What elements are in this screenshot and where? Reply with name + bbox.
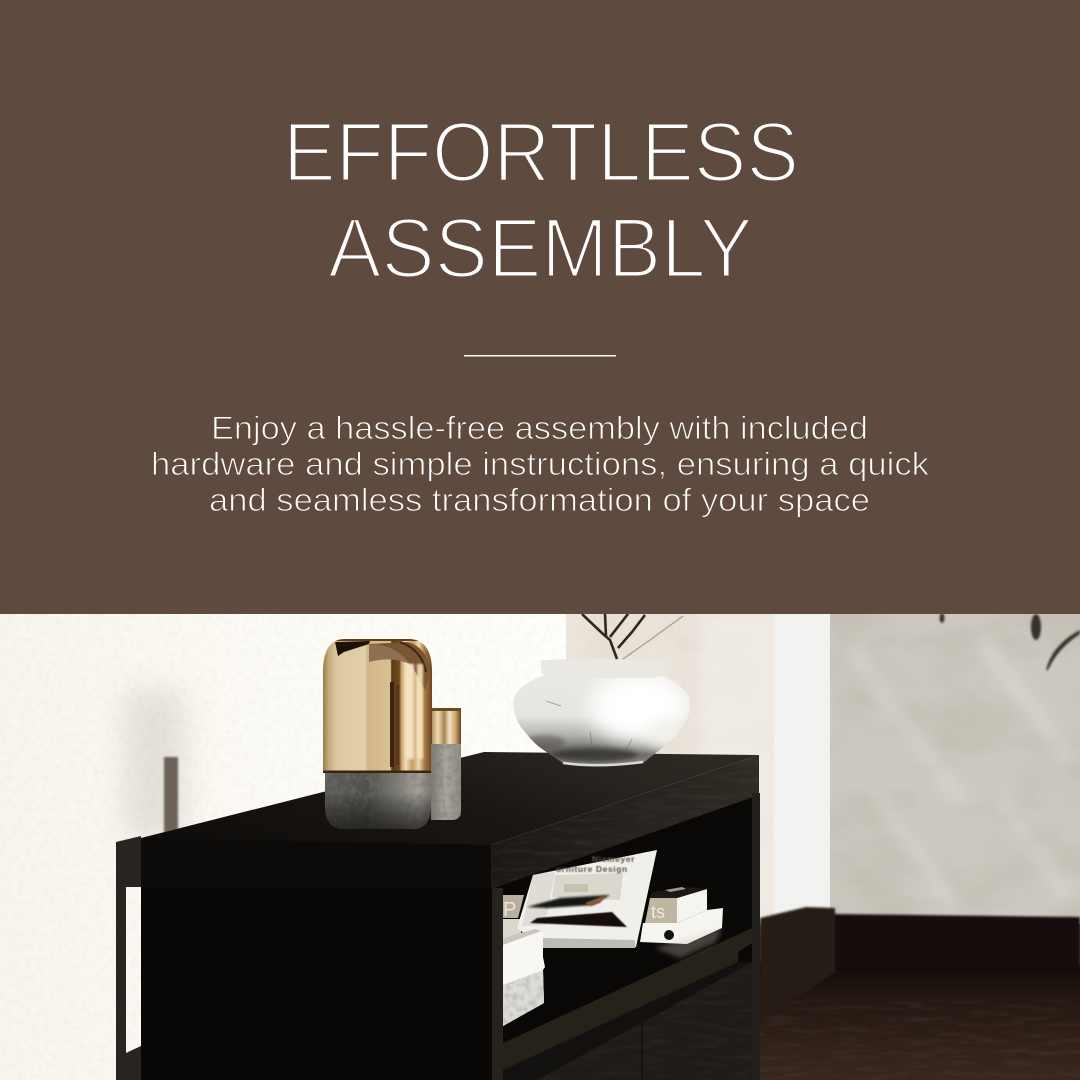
photo: styled cabinet scene: [0, 613, 1080, 1080]
drawer fronts: [537, 962, 752, 1080]
wall: right marble section: [830, 614, 1080, 924]
open compartment interior: [491, 790, 760, 1080]
cabinet top surface: [141, 752, 759, 845]
cabinet front: [141, 885, 492, 1080]
wall shadows: [116, 690, 185, 1080]
open design book: urniture Design: [556, 864, 628, 874]
stacked books on shelf: ts: [651, 902, 665, 922]
open design book: [517, 850, 657, 948]
stacked books on shelf: [640, 887, 723, 958]
gold and concrete tall vase: [323, 639, 432, 830]
shelf front edge: [503, 928, 752, 1070]
background book: [503, 895, 524, 939]
title: [283, 105, 799, 295]
side posts: [492, 888, 503, 1080]
wall: middle section: [566, 614, 834, 924]
baseboard and floor: [760, 907, 1080, 1080]
title: EFFORTLESS: [283, 105, 799, 199]
open design book: Niemeyer: [592, 854, 635, 864]
description text: hardware and simple instructions, ensuring a quick: [151, 446, 930, 482]
top colour panel: [0, 0, 1080, 614]
branches: [582, 614, 683, 659]
description text: Enjoy a hassle-free assembly with included: [211, 410, 868, 446]
background book: P: [503, 899, 516, 921]
cabinet: [141, 752, 760, 1080]
shelf underside strip: [503, 962, 752, 1080]
white ceramic pot: [513, 659, 694, 765]
description text: [151, 410, 930, 518]
title: ASSEMBLY: [328, 201, 753, 295]
cabinet side strip: [491, 755, 759, 889]
description text: and seamless transformation of your space: [209, 482, 870, 518]
divider line: [464, 355, 616, 356]
blurred plant leaves: [940, 613, 1080, 670]
small gold and concrete vase: [431, 708, 461, 820]
wall: left white section: [0, 614, 570, 1080]
white book stack, foreground: [503, 929, 545, 1026]
